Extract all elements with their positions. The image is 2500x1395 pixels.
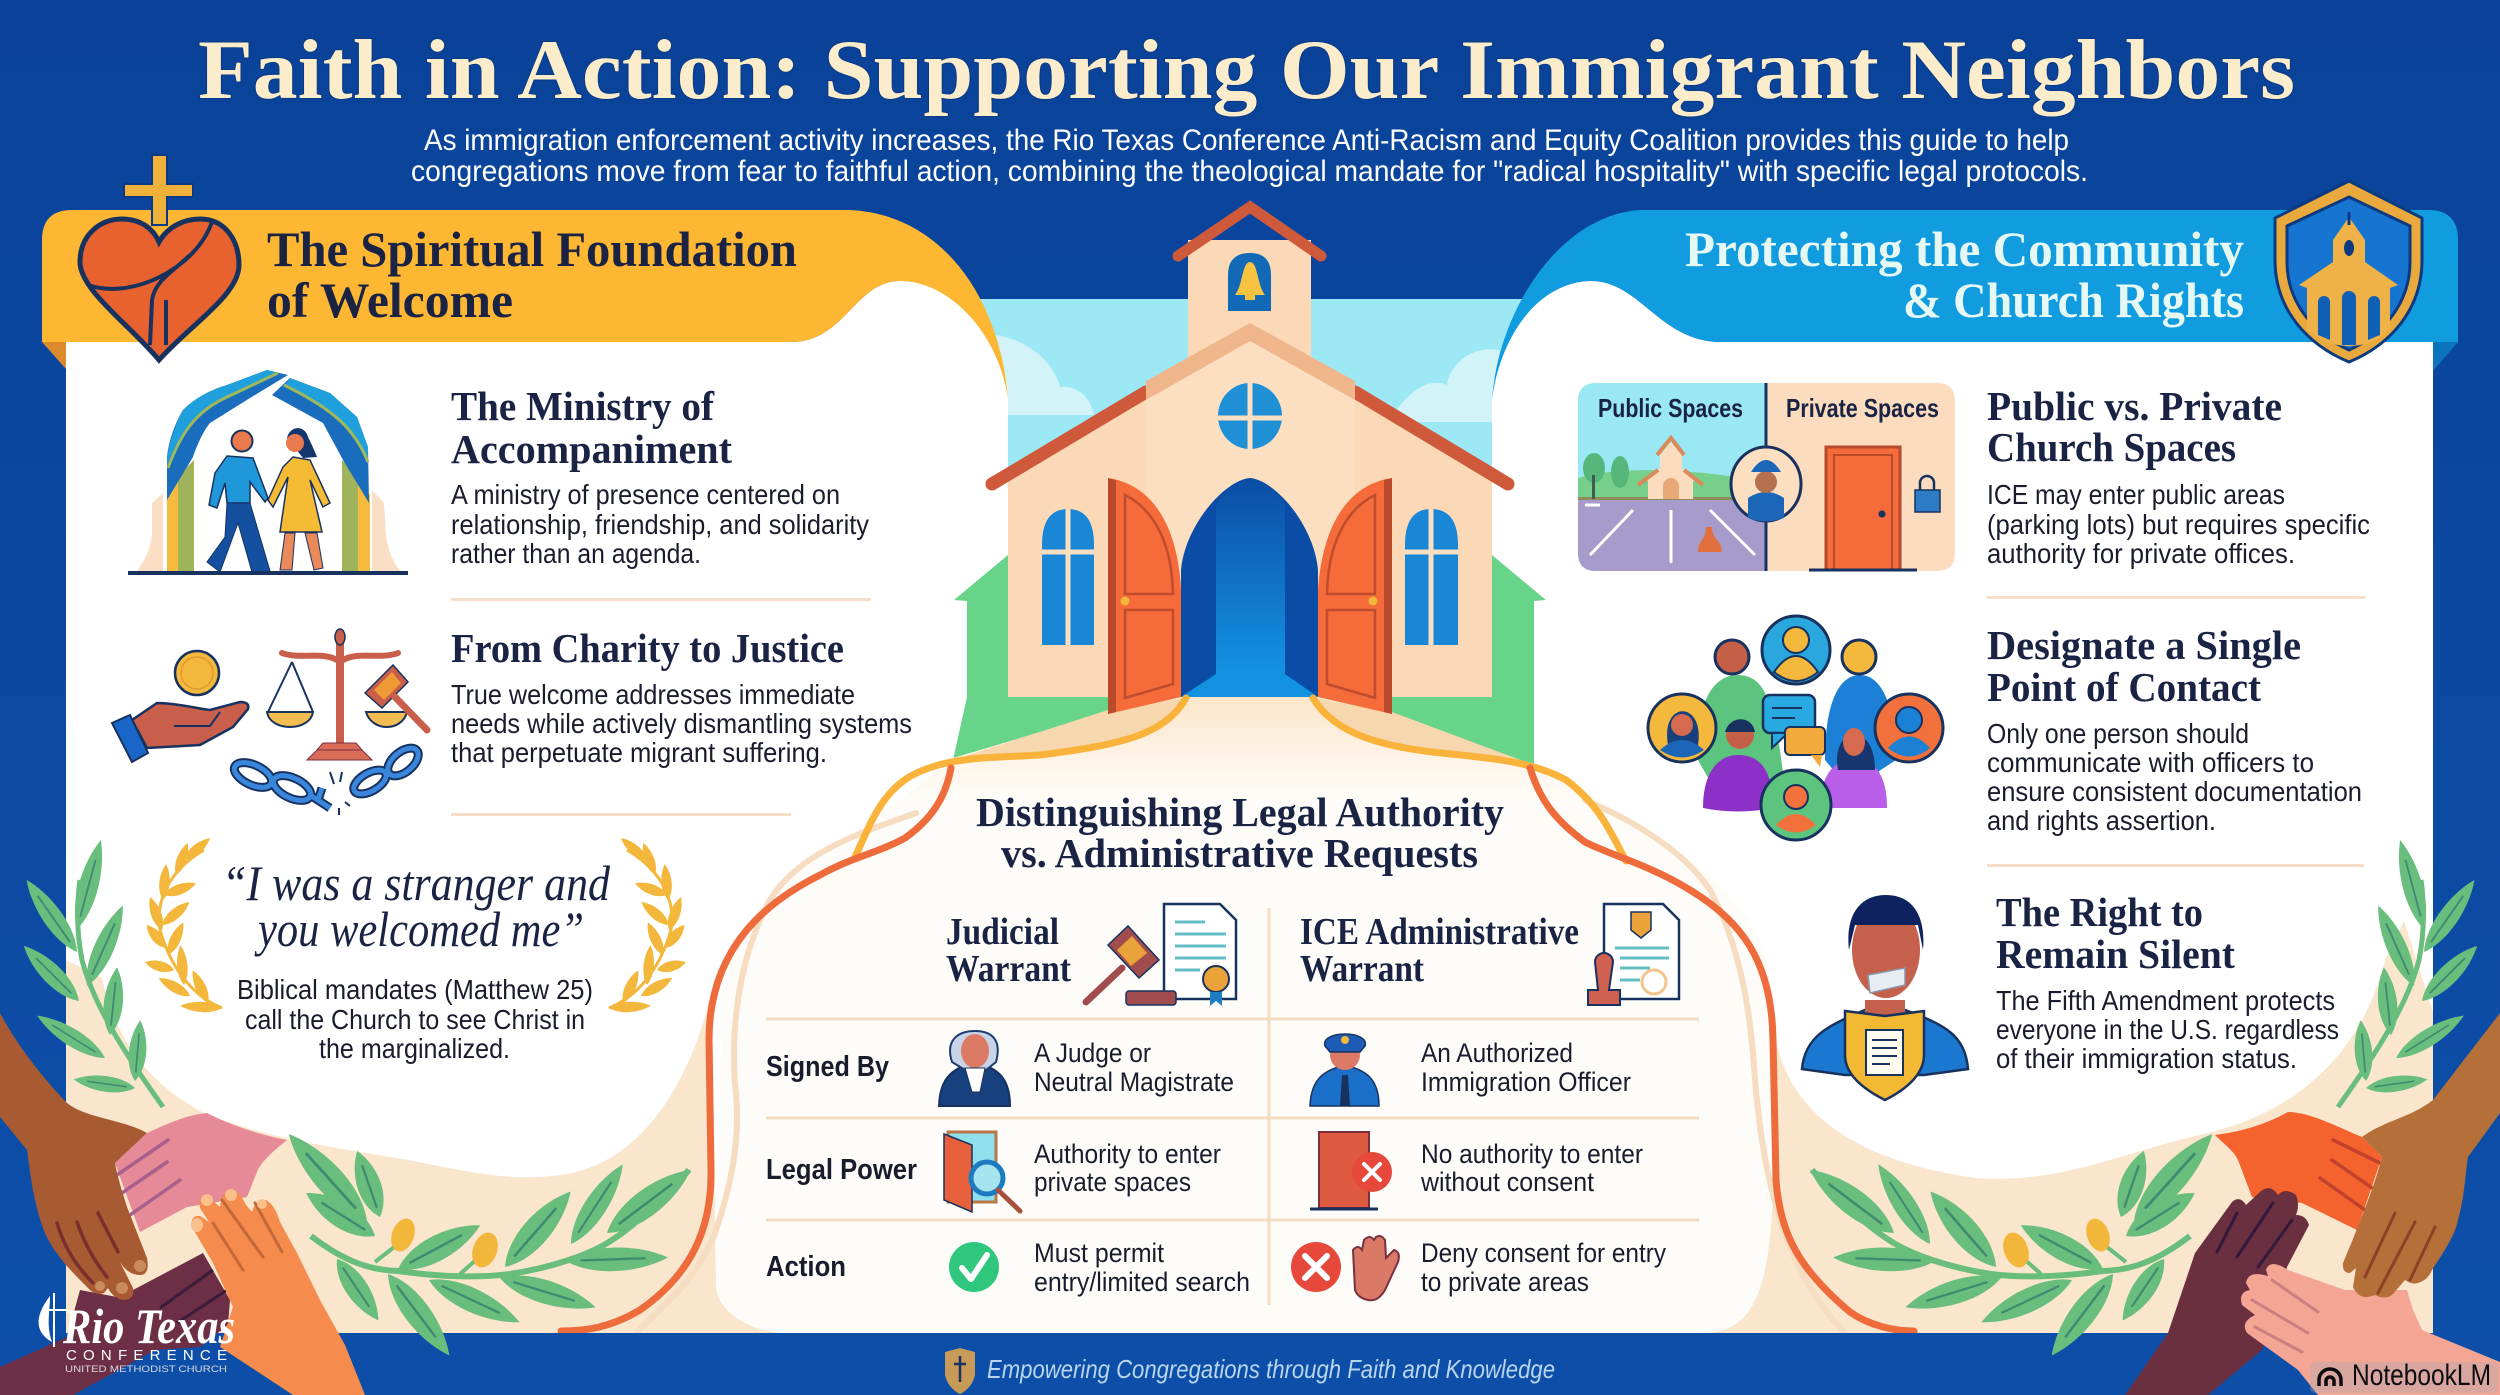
text: public vs private description: ICE may enter public areas <box>1987 479 2285 510</box>
title: Faith in Action: Supporting Our Immigrant Neighbors <box>198 23 2295 117</box>
text: biblical mandates: call the Church to see Christ in <box>245 1004 585 1035</box>
heading: public vs private: Church Spaces <box>1987 424 2236 470</box>
heading: single point of contact: Point of Contact <box>1987 664 2261 710</box>
text: authorized officer <box>1421 1038 1631 1097</box>
church illustration <box>992 207 1508 714</box>
right wing of church <box>1355 392 1492 697</box>
text: right to silence description <box>1996 985 2339 1074</box>
path from church doors <box>900 697 1600 800</box>
card: public vs private spaces: Public Spaces <box>1598 393 1743 423</box>
text: authority to enter <box>1034 1139 1221 1197</box>
column head: ice administrative warrant: Warrant <box>1300 948 1424 990</box>
text: no authority <box>1420 1139 1643 1197</box>
text: deny consent: to private areas <box>1421 1267 1589 1297</box>
icon: gavel and signed document <box>1086 904 1236 1006</box>
bottom footer bar <box>0 1333 2500 1395</box>
left header band <box>42 210 1008 400</box>
right header band <box>1492 210 2458 400</box>
text: authority to enter: Authority to enter <box>1034 1139 1221 1169</box>
text: public vs private description <box>1987 479 2370 569</box>
subtitle: As immigration enforcement activity increases, the Rio Texas Conference Anti-Racism and Equity Coalition provides this guide to help <box>424 124 2069 157</box>
text: biblical mandates <box>237 974 593 1064</box>
logo: Rio Texas Conference <box>39 1293 235 1375</box>
green hills <box>953 555 1546 765</box>
footer text: Empowering Congregations through Faith and Knowledge <box>987 1354 1555 1384</box>
doorway opening <box>1181 478 1318 697</box>
text: no authority: without consent <box>1420 1167 1594 1197</box>
quote: “I was a stranger and <box>222 855 611 911</box>
cream lower left ground <box>66 960 787 1333</box>
central gable trim <box>1146 323 1355 400</box>
icon: footer shield <box>945 1348 975 1394</box>
icon: cross and flame <box>39 1293 68 1347</box>
heading: distinguishing legal authority: vs. Administrative Requests <box>1001 830 1478 876</box>
text: no authority: No authority to enter <box>1421 1139 1643 1169</box>
icon: red cross and stop hand <box>1291 1236 1399 1300</box>
left bottom hands <box>0 1013 365 1395</box>
text: right to silence description: of their immigration status. <box>1996 1043 2297 1074</box>
heading: ministry of accompaniment: The Ministry of <box>451 383 715 429</box>
icon: heart with cross <box>80 155 239 360</box>
text: single point description: and rights assertion. <box>1987 805 2216 836</box>
card: public vs private spaces: Private Spaces <box>1786 393 1939 423</box>
icon: hand, coin, scales, broken chain <box>112 629 427 815</box>
heading: ministry of accompaniment: Accompaniment <box>451 426 732 472</box>
heading: charity to justice: From Charity to Justice <box>451 625 844 671</box>
heading: right to remain silent <box>1996 889 2235 977</box>
column head: judicial warrant: Judicial <box>946 911 1059 953</box>
text: charity description: needs while actively dismantling systems <box>451 708 912 739</box>
side roofs <box>992 392 1508 484</box>
text: public vs private description: (parking lots) but requires specific <box>1987 509 2370 540</box>
text: ministry description <box>451 479 869 569</box>
text: deny consent: Deny consent for entry <box>1421 1238 1666 1268</box>
icon: two people under arch <box>128 370 408 575</box>
table grid <box>766 908 1699 1305</box>
row label: signed by: Signed By <box>766 1051 889 1083</box>
text: charity description: True welcome addresses immediate <box>451 679 855 710</box>
icon: door with cross <box>1310 1132 1392 1209</box>
text: ministry description: rather than an agenda. <box>451 538 701 569</box>
text: authorized officer: Immigration Officer <box>1421 1067 1631 1097</box>
pink hand <box>2241 1264 2500 1395</box>
column head: ice administrative warrant: ICE Administrative <box>1300 911 1579 953</box>
panel: left column items <box>112 370 912 1064</box>
heading: right to remain silent: Remain Silent <box>1996 931 2235 977</box>
quote <box>222 855 611 957</box>
text: biblical mandates: Biblical mandates (Matthew 25) <box>237 974 593 1005</box>
text: judge or magistrate: Neutral Magistrate <box>1034 1067 1234 1097</box>
logo wordmark: Rio Texas <box>62 1298 235 1354</box>
left bottom olive branch <box>278 1125 699 1363</box>
quote: you welcomed me” <box>254 901 584 957</box>
column head: judicial warrant: Warrant <box>946 948 1071 990</box>
sky behind church <box>970 299 1530 719</box>
round window <box>1218 383 1282 449</box>
column head: ice administrative warrant <box>1300 911 1579 990</box>
text: ministry description: A ministry of presence centered on <box>451 479 840 510</box>
logo church name: UNITED METHODIST CHURCH <box>65 1364 227 1375</box>
right arched window <box>1405 509 1458 645</box>
text: public vs private description: authority for private offices. <box>1987 538 2295 569</box>
left side olive branch <box>17 838 163 1107</box>
icon: stamp and badge document <box>1588 904 1679 1005</box>
maroon hand <box>2125 1188 2309 1395</box>
subtitle: congregations move from fear to faithful action, combining the theological mandate for "radical hospitality" with specific legal protocols. <box>411 155 2088 188</box>
card: public vs private spaces <box>1578 383 1955 571</box>
text: charity description <box>451 679 912 768</box>
left arched window <box>1042 509 1094 645</box>
text: biblical mandates: the marginalized. <box>319 1033 510 1064</box>
heading: spiritual foundation <box>267 221 797 328</box>
right side olive branch <box>2338 838 2484 1107</box>
logo conference: CONFERENCE <box>66 1347 227 1364</box>
heading: spiritual foundation: The Spiritual Foundation <box>267 221 797 277</box>
text: authorized officer: An Authorized <box>1421 1038 1573 1068</box>
subtitle <box>411 124 2088 188</box>
orange hand <box>191 1189 365 1395</box>
icon: silenced person with shield <box>1802 895 1968 1100</box>
icon: church shield <box>2275 181 2422 362</box>
row label: action: Action <box>766 1251 846 1283</box>
central comparison backing <box>716 800 1773 1333</box>
heading: public vs private <box>1987 383 2282 470</box>
left wing of church <box>1008 392 1146 697</box>
text: judge or magistrate <box>1034 1038 1234 1097</box>
right bottom olive branch <box>1802 1125 2223 1363</box>
heading: spiritual foundation: of Welcome <box>267 272 513 328</box>
heading: public vs private: Public vs. Private <box>1987 383 2282 429</box>
heading: right to remain silent: The Right to <box>1996 889 2203 935</box>
text: charity description: that perpetuate migrant suffering. <box>451 737 827 768</box>
laurel wreath right <box>609 834 688 1013</box>
text: right to silence description: everyone in the U.S. regardless <box>1996 1014 2339 1045</box>
heading: ministry of accompaniment <box>451 383 732 472</box>
text: judge or magistrate: A Judge or <box>1034 1038 1151 1068</box>
cream lower right ground <box>1701 921 2433 1333</box>
heading: single point of contact: Designate a Single <box>1987 622 2301 668</box>
column head: judicial warrant <box>946 911 1071 990</box>
text: right to silence description: The Fifth Amendment protects <box>1996 985 2335 1016</box>
text: deny consent <box>1421 1238 1666 1297</box>
text: single point description: Only one person should <box>1987 718 2249 749</box>
panel: right column items <box>1578 383 2370 1100</box>
text: single point description <box>1987 718 2362 836</box>
pink hand <box>115 1113 287 1232</box>
ribbon lines framing comparison table <box>561 698 1914 1331</box>
right bottom hands <box>2125 1013 2500 1395</box>
icon: judge <box>939 1031 1010 1106</box>
orange hand <box>2215 1112 2382 1230</box>
central nave <box>1146 335 1355 697</box>
heading: protecting the community: & Church Rights <box>1903 272 2244 328</box>
heading: single point of contact <box>1987 622 2301 710</box>
text: must permit: entry/limited search <box>1034 1267 1250 1297</box>
right open door <box>1318 478 1392 714</box>
text: authority to enter: private spaces <box>1034 1167 1191 1197</box>
icon: officer <box>1310 1034 1379 1106</box>
text: ministry description: relationship, friendship, and solidarity <box>451 509 869 540</box>
maroon arm <box>0 1253 230 1395</box>
row label: legal power: Legal Power <box>766 1154 917 1186</box>
icon: green check <box>949 1242 999 1292</box>
bell tower <box>1178 207 1321 370</box>
text: single point description: ensure consistent documentation <box>1987 776 2362 807</box>
text: must permit: Must permit <box>1034 1238 1164 1268</box>
heading: distinguishing legal authority <box>976 789 1504 876</box>
heading: distinguishing legal authority: Distinguishing Legal Authority <box>976 789 1504 835</box>
icon: group of people with speech bubbles <box>1648 616 1943 840</box>
footer tagline <box>945 1348 1555 1394</box>
heading: protecting the community: Protecting the Community <box>1685 221 2244 277</box>
panel: legal authority comparison <box>766 789 1699 1305</box>
text: must permit <box>1034 1238 1250 1297</box>
white page body <box>66 281 2433 1333</box>
brown arm and hand <box>2343 1013 2500 1298</box>
laurel wreath left <box>143 834 222 1013</box>
icon: door with magnifying glass <box>944 1132 1020 1212</box>
left open door <box>1108 478 1181 714</box>
brown arm and hand <box>0 1013 148 1300</box>
heading: protecting the community <box>1685 221 2244 328</box>
text: single point description: communicate with officers to <box>1987 747 2314 778</box>
